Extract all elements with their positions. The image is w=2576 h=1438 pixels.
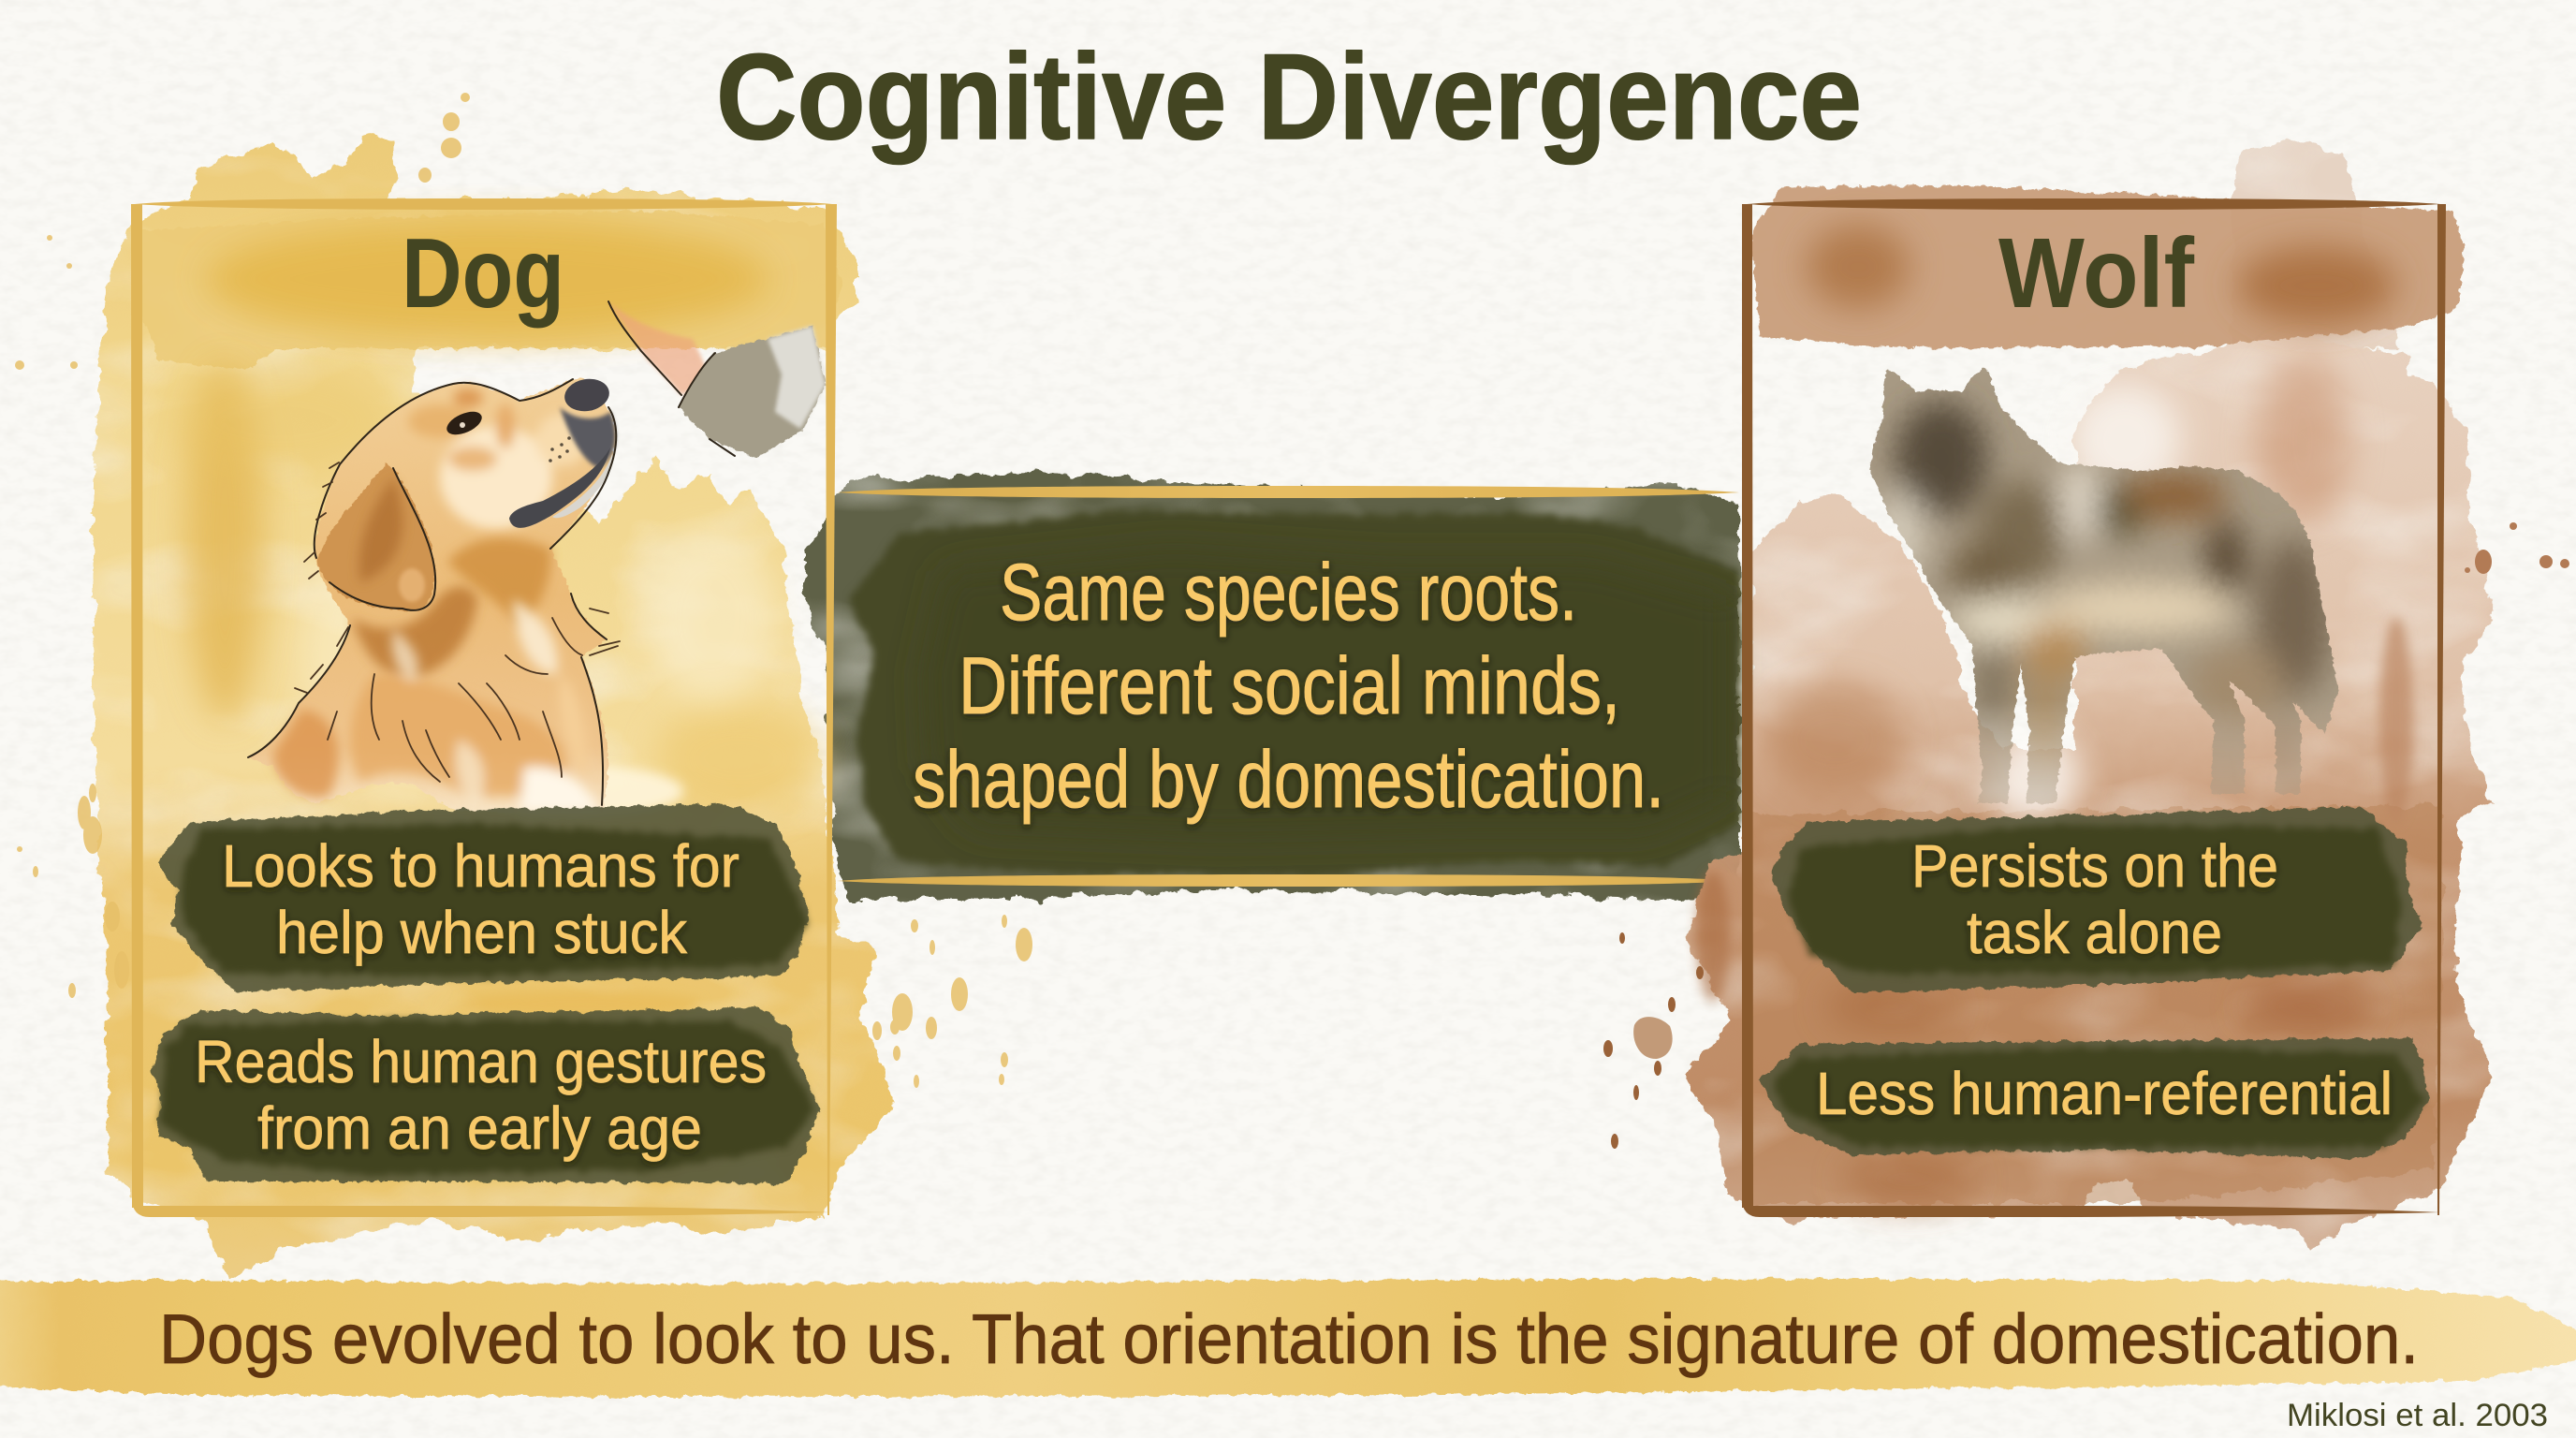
- dog trait 2: Reads human gestures: [195, 1028, 767, 1095]
- panel: wolf: [1603, 140, 2569, 1246]
- dog neck shadow: [352, 587, 477, 677]
- dog trait 1: [157, 804, 810, 991]
- wolf trait 1: task alone: [1967, 899, 2222, 966]
- citation: Miklosi et al. 2003: [2287, 1398, 2548, 1433]
- wolf coat patches: [1876, 401, 2331, 786]
- wolf trait 1: Persists on the: [1911, 832, 2278, 900]
- centre text: [913, 548, 1664, 825]
- wolf trait 2: Less human-referential: [1816, 1060, 2393, 1127]
- illustration: wolf silhouette: [1869, 367, 2338, 805]
- wolf trait 2: [1758, 1038, 2429, 1159]
- dog eye: [444, 407, 485, 439]
- dog trait 2: [151, 1007, 820, 1183]
- dog neck ruff: [447, 538, 551, 629]
- centre bottom rule: [837, 874, 1739, 887]
- dog outline and fur strokes: [248, 379, 620, 805]
- wolf frame: [1742, 198, 2446, 1217]
- wolf heading: Wolf: [1998, 218, 2195, 329]
- dog trait 1: Looks to humans for: [222, 832, 739, 900]
- centre text: shaped by domestication.: [913, 735, 1664, 825]
- illustration: golden retriever looking up: [248, 375, 620, 812]
- icon: human hand and sleeve: [608, 301, 826, 458]
- dog splatters: [15, 93, 1032, 1088]
- title: Cognitive Divergence: [716, 28, 1862, 165]
- dog heading: Dog: [402, 218, 564, 329]
- band wash: [0, 1279, 2576, 1397]
- dog frame: [131, 198, 837, 1217]
- centre text: Different social minds,: [959, 641, 1620, 731]
- bottom takeaway band: [0, 1279, 2576, 1397]
- dog muzzle shading: [560, 407, 616, 468]
- dog trait 1: help when stuck: [276, 899, 688, 966]
- wolf splatters: [1603, 522, 2569, 1149]
- panel: centre message: [805, 473, 1739, 902]
- dog watercolour wash: [94, 133, 895, 1280]
- dog ear: [316, 462, 434, 610]
- dog nose: [562, 375, 612, 415]
- centre text: Same species roots.: [1000, 548, 1577, 638]
- band text: Dogs evolved to look to us. That orientation is the signature of domestication.: [159, 1299, 2419, 1378]
- centre wash background: [805, 473, 1739, 902]
- panel: dog: [15, 93, 1032, 1280]
- dog chest fur: [273, 599, 599, 812]
- dog face highlight: [408, 389, 588, 529]
- wolf trait 1: [1771, 807, 2422, 992]
- dog trait 2: from an early age: [257, 1094, 702, 1162]
- dog mouth: [509, 448, 610, 528]
- wolf watercolour wash: [1686, 140, 2494, 1246]
- centre top rule: [837, 486, 1739, 498]
